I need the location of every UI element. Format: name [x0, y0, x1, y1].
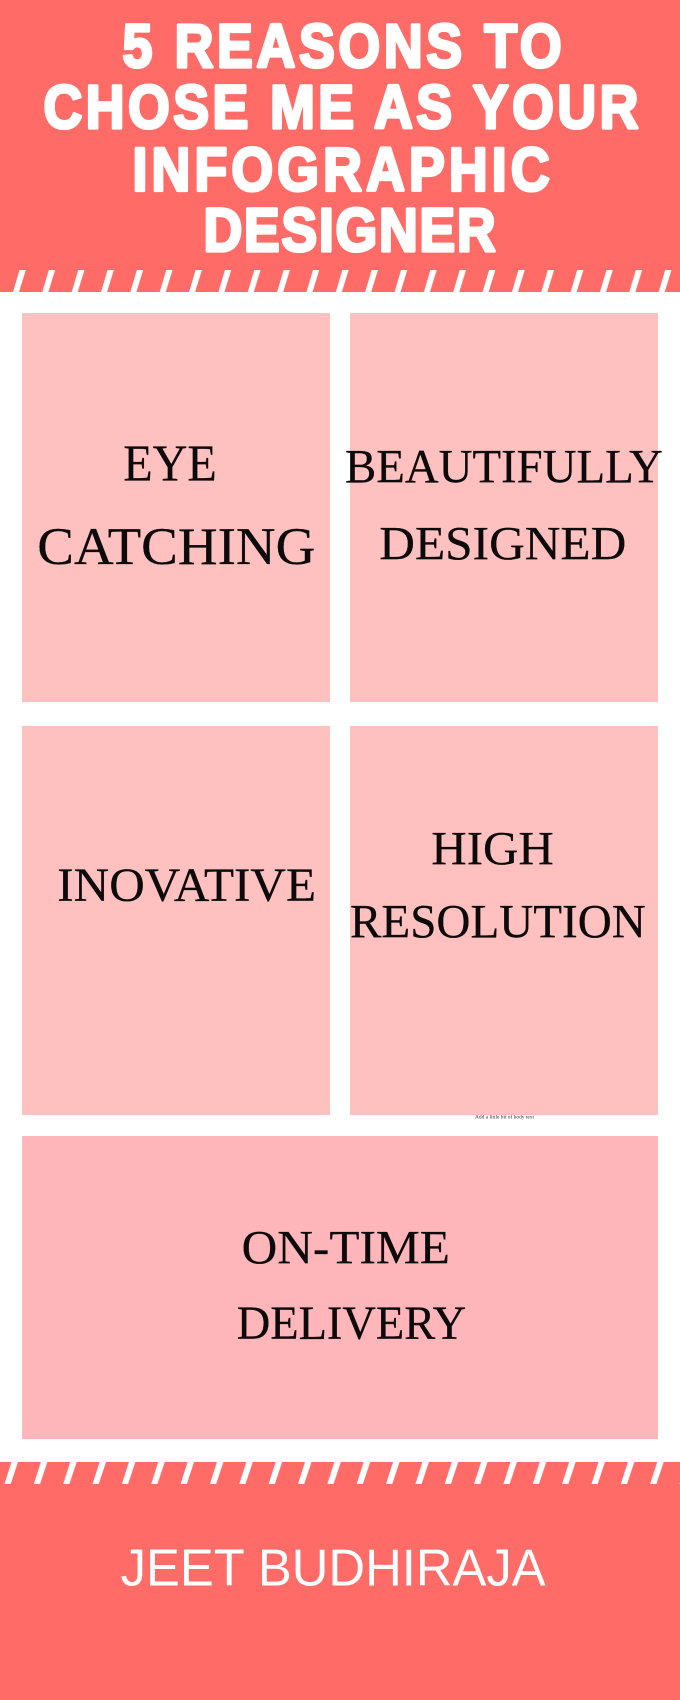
- title: 5 REASONS TO: [122, 13, 562, 81]
- footer name: JEET BUDHIRAJA: [121, 1540, 546, 1598]
- title: INFOGRAPHIC: [132, 136, 550, 204]
- panel: high resolution: HIGH: [431, 822, 554, 875]
- stripe band: footer: [0, 1462, 680, 1484]
- panel: eye catching: [22, 313, 330, 702]
- panel: inovative: INOVATIVE: [57, 859, 316, 912]
- panel: high resolution: RESOLUTION: [350, 895, 646, 948]
- panel: beautifully designed: BEAUTIFULLY: [345, 441, 663, 494]
- panel: beautifully designed: DESIGNED: [379, 517, 626, 570]
- title: [44, 13, 638, 265]
- panel: inovative: [22, 726, 330, 1115]
- panel: footer banner: [0, 1462, 680, 1700]
- panel: on-time delivery: ON-TIME: [242, 1221, 450, 1274]
- title: DESIGNER: [204, 197, 496, 265]
- panel: high resolution: [350, 726, 658, 1115]
- stripe band: header: [0, 270, 680, 292]
- panel: eye catching: CATCHING: [37, 518, 315, 576]
- panel: beautifully designed: [345, 313, 663, 702]
- panel: eye catching: EYE: [123, 435, 217, 492]
- panel: on-time delivery: DELIVERY: [237, 1297, 466, 1350]
- panel: header banner: [0, 0, 680, 292]
- title: CHOSE ME AS YOUR: [44, 74, 638, 142]
- panel: on-time delivery: [22, 1136, 658, 1439]
- small caption under high resolution panel: Add a little bit of body text: [475, 1116, 535, 1120]
